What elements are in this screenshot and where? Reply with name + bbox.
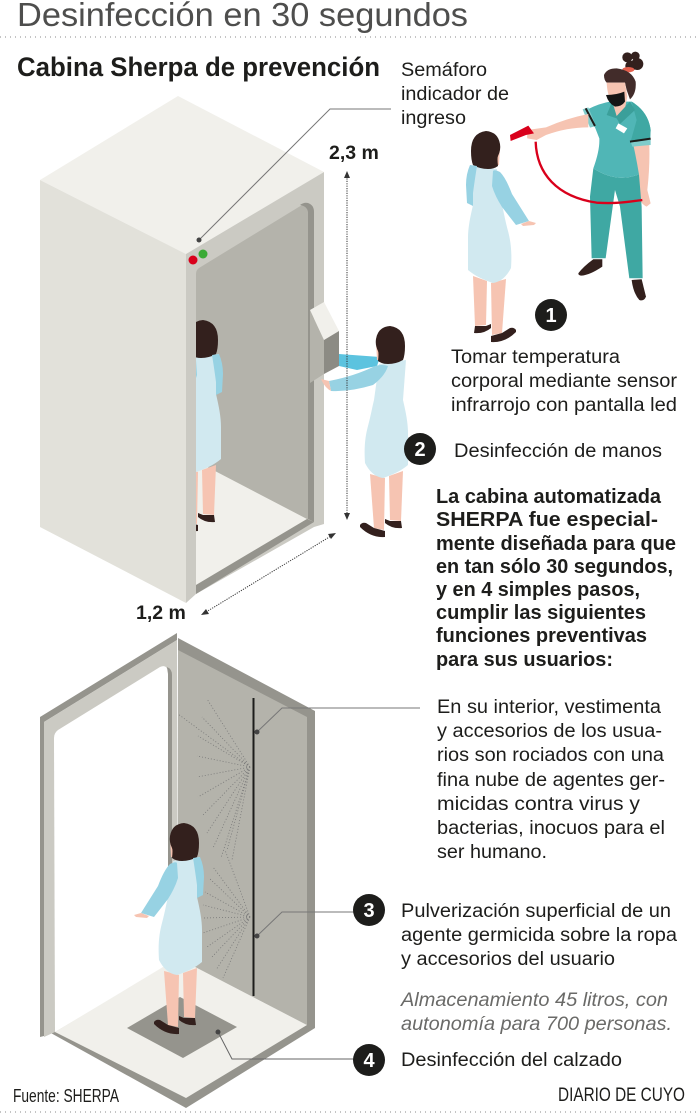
width dimension 1,2 m: 1,2 m [136, 602, 186, 624]
callout: nozzles text: ser humano. [437, 842, 547, 863]
storage note: autonomía para 700 personas. [401, 1014, 672, 1035]
cabin door edge [300, 203, 314, 522]
intro paragraph: en tan sólo 30 segundos, [436, 555, 673, 578]
face and neck [607, 83, 627, 116]
callout: traffic light: Semáforo [401, 60, 487, 81]
cabin interior wall [196, 205, 308, 520]
hair bun [622, 52, 643, 71]
step 1 marker [535, 299, 567, 331]
cabin side face [40, 180, 186, 603]
step 4 text: Desinfección del calzado [401, 1050, 622, 1071]
nurse with thermometer [510, 52, 651, 300]
intro paragraph: y en 4 simples pasos, [436, 578, 640, 601]
cabin top face [40, 96, 324, 254]
collar [607, 102, 635, 124]
hair [604, 68, 636, 99]
callout: nozzles text: En su interior, vestimenta [437, 697, 661, 718]
body [360, 326, 408, 537]
intro paragraph [436, 485, 676, 671]
sleeve cuff left [583, 107, 596, 128]
storage note: Almacenamiento 45 litros, con [400, 990, 668, 1011]
pants [590, 168, 643, 278]
far arm [339, 354, 380, 370]
step 3 marker with leader: 3 [363, 900, 375, 922]
cabin floor [196, 461, 307, 585]
height dimension 2,3 m: 2,3 m [329, 142, 379, 164]
step 2 marker: 2 [414, 439, 426, 461]
height dimension 2,3 m [329, 142, 379, 520]
thermometer [510, 126, 534, 141]
shoe disinfection mat [127, 997, 237, 1058]
step 1 text: corporal mediante sensor [451, 371, 678, 392]
floor [55, 958, 307, 1098]
hand [321, 379, 331, 391]
sleeve cuff right [631, 139, 651, 147]
step 1 text: infrarrojo con pantalla led [451, 395, 677, 416]
person having temperature taken [466, 131, 536, 342]
step 3 marker with leader [254, 894, 385, 938]
step 3 text: y accesorios del usuario [401, 949, 615, 970]
storage note [400, 990, 672, 1035]
callout: nozzles text: rios son rociados con una [437, 745, 664, 766]
step 4 marker with leader: 4 [363, 1050, 375, 1072]
step 4 marker with leader [216, 1030, 385, 1076]
cabin threshold [196, 519, 314, 594]
shoulder shading [631, 102, 651, 142]
back arm [633, 145, 651, 207]
step 3 text: Pulverización superficial de un [401, 901, 671, 922]
step 3 text: agente germicida sobre la ropa [401, 925, 677, 946]
callout: traffic light: indicador de [401, 84, 509, 105]
thermometer cable [536, 142, 642, 203]
callout: traffic light: ingreso [401, 108, 466, 129]
callout: nozzles text: fina nube de agentes ger- [437, 770, 665, 791]
badge [616, 123, 627, 133]
back wall [178, 650, 307, 1025]
callout: nozzles text [254, 697, 665, 863]
width dimension 1,2 m [136, 533, 336, 624]
intro paragraph: funciones preventivas [436, 624, 647, 647]
cabin front frame [186, 172, 324, 603]
step 1 text: Tomar temperatura [451, 347, 620, 368]
callout: nozzles text: bacterias, inocuos para el [437, 818, 665, 839]
step 2 marker [404, 433, 436, 465]
step 1 marker: 1 [545, 305, 557, 327]
door frame outer edge [40, 633, 177, 1037]
hull [49, 638, 315, 1108]
person inside cabin [196, 320, 223, 532]
mask [606, 92, 625, 107]
illustration: exterior cabin [40, 96, 324, 603]
intro paragraph: mente diseñada para que [436, 532, 676, 555]
tunic [584, 102, 651, 178]
hand sanitizer dispenser [310, 302, 339, 383]
callout: traffic light [196, 60, 509, 242]
person at dispenser [321, 326, 408, 537]
near arm [329, 365, 388, 391]
heading: cabina: Cabina Sherpa de prevención [17, 52, 380, 82]
shoes [578, 259, 602, 276]
callout: nozzles text: micidas contra virus y [437, 794, 641, 815]
door jamb [167, 667, 172, 965]
nozzle pipe [252, 698, 254, 996]
pointing arm [527, 114, 588, 140]
step 1 text [451, 347, 678, 416]
spray lower [203, 850, 250, 978]
intro paragraph: La cabina automatizada [436, 485, 662, 508]
hair band [622, 67, 634, 72]
step 2 text: Desinfección de manos [454, 441, 662, 462]
intro paragraph: SHERPA fue especial- [436, 508, 658, 531]
illustration: interior cabin [40, 633, 315, 1108]
person on mat [134, 823, 204, 1034]
door opening [54, 666, 168, 1032]
traffic lights [188, 250, 208, 264]
intro paragraph: cumplir las siguientes [436, 601, 646, 624]
door frame [44, 640, 178, 1037]
spray upper [178, 699, 250, 860]
source: Fuente: SHERPA [13, 1086, 119, 1106]
step 3 text [401, 901, 677, 970]
intro paragraph: para sus usuarios: [436, 648, 613, 671]
callout: nozzles text: y accesorios de los usua- [437, 721, 662, 742]
